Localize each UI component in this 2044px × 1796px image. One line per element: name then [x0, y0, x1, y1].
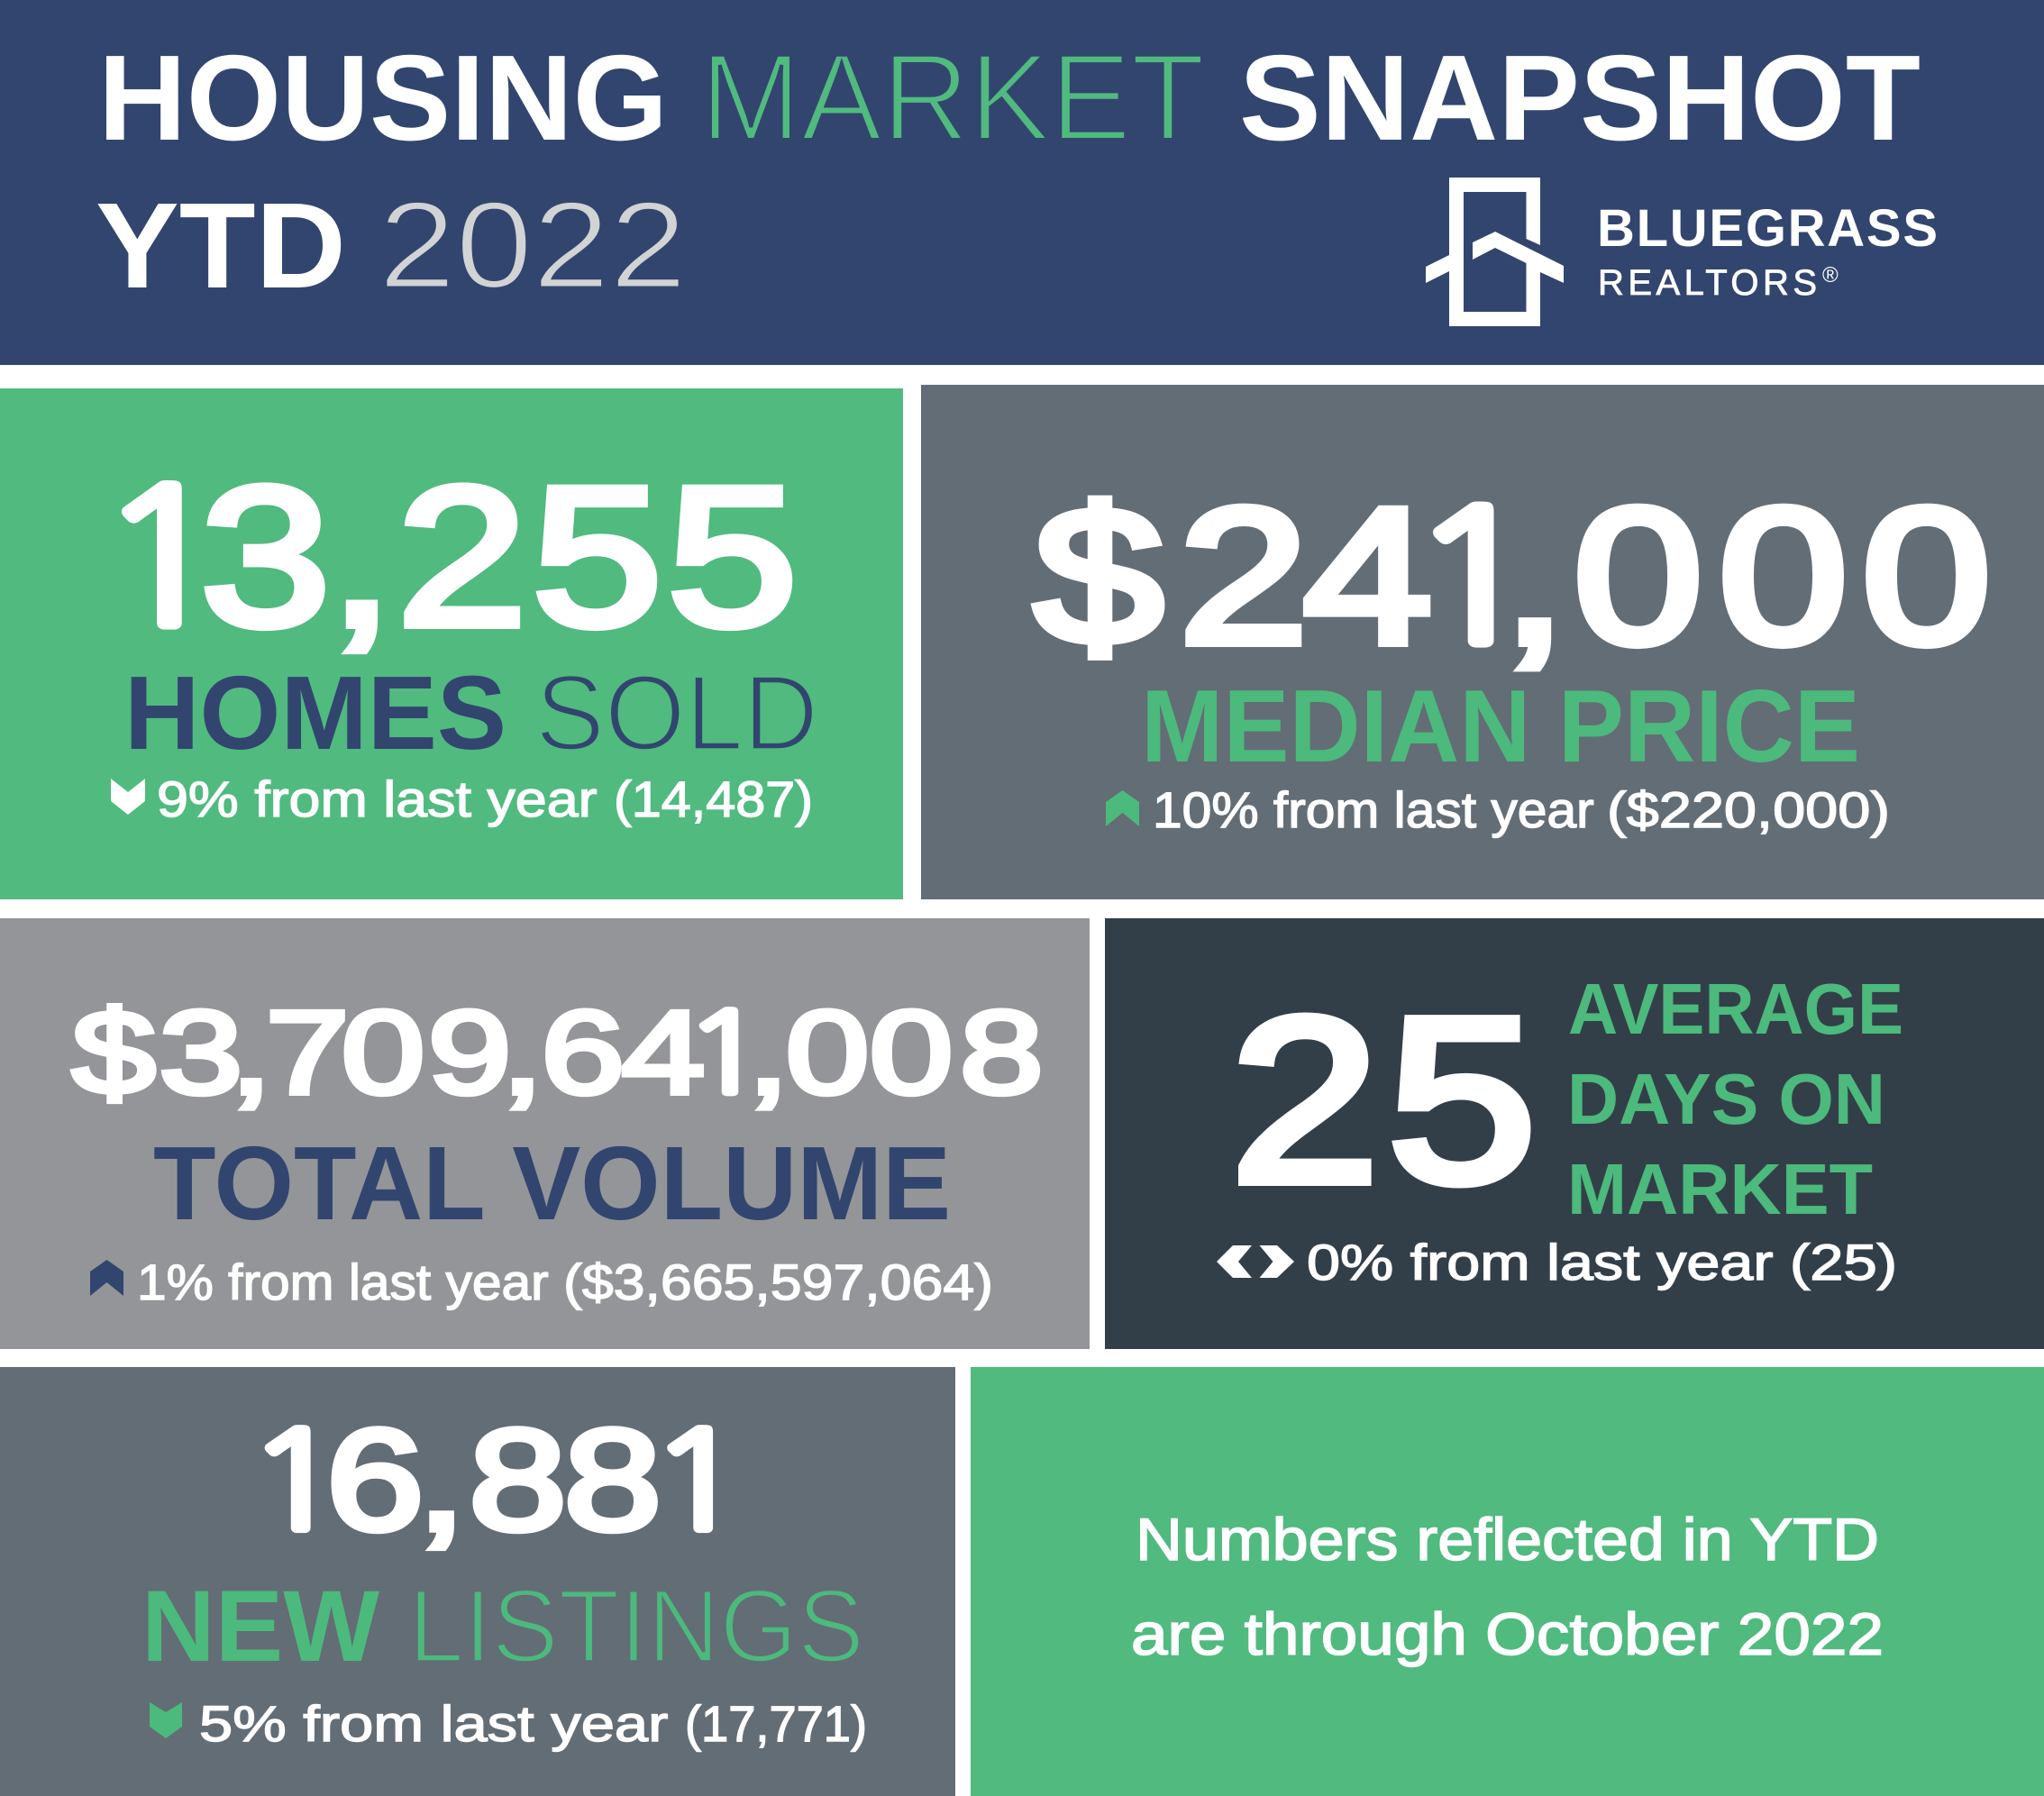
- note text: [1131, 1506, 1884, 1667]
- change text: 9% from last year: [157, 770, 613, 827]
- panel: note: [971, 1367, 2044, 1796]
- change text: 10% from last year: [1153, 781, 1609, 838]
- title line 2: YTD: [96, 178, 346, 314]
- panel: homes sold: [0, 388, 903, 899]
- big number: 25: 25: [1230, 970, 1537, 1231]
- icon: house in door: [1426, 178, 1564, 326]
- title line 1: MARKET: [700, 29, 1205, 167]
- panel: median price: [921, 385, 2044, 899]
- big number: $241,000: $241,000: [1035, 469, 1991, 684]
- title line 1: SNAPSHOT: [1239, 30, 1921, 166]
- logo wordmark: ®: [1822, 263, 1839, 287]
- change text: 0% from last year: [1307, 1234, 1790, 1290]
- heading: homes sold: [124, 653, 818, 773]
- heading: average days on market: DAYS ON: [1567, 1059, 1885, 1139]
- change text: (14,487): [614, 770, 813, 827]
- change text: 5% from last year: [199, 1695, 685, 1752]
- logo wordmark: REALTORS: [1598, 263, 1817, 303]
- change text: (17,771): [685, 1695, 867, 1752]
- change text: (25): [1790, 1234, 1897, 1290]
- logo: Bluegrass Realtors: [1426, 178, 1938, 326]
- heading: median price: MEDIAN PRICE: [1141, 670, 1860, 784]
- icon: down chevron: [150, 1702, 182, 1738]
- icon: down chevron: [111, 779, 145, 815]
- change text: ($220,000): [1607, 781, 1890, 838]
- heading: homes sold: SOLD: [535, 653, 818, 773]
- title line 2: 2022: [379, 177, 687, 315]
- heading: new listings: NEW: [141, 1570, 379, 1682]
- note text: are through October 2022: [1131, 1600, 1884, 1667]
- heading: new listings: LISTINGS: [408, 1569, 864, 1684]
- change text: ($3,665,597,064): [563, 1254, 993, 1310]
- note text: Numbers reflected in YTD: [1136, 1506, 1879, 1573]
- icon: up chevron: [90, 1260, 123, 1296]
- title line 2: [96, 177, 687, 315]
- logo wordmark: [1597, 199, 1938, 303]
- big number: 16,881: 16,881: [245, 1399, 748, 1560]
- heading: average days on market: [1567, 969, 1903, 1229]
- panel: average days on market: [1105, 918, 2044, 1349]
- heading: average days on market: AVERAGE: [1568, 969, 1903, 1049]
- big number: 13,255: 13,255: [95, 445, 798, 667]
- big number: $3,709,641,008: $3,709,641,008: [72, 986, 1044, 1118]
- panel: total volume: [0, 918, 1090, 1349]
- logo wordmark: BLUEGRASS: [1597, 199, 1938, 258]
- icon: no-change chevrons: [1217, 1245, 1294, 1278]
- heading: average days on market: MARKET: [1567, 1149, 1873, 1229]
- icon: up chevron: [1106, 790, 1139, 826]
- title line 1: [98, 29, 1921, 167]
- title line 1: HOUSING: [98, 30, 668, 166]
- heading: new listings: [141, 1569, 864, 1684]
- panel: header: [0, 0, 2044, 365]
- change text: 1% from last year: [137, 1254, 563, 1310]
- heading: homes sold: HOMES: [124, 654, 506, 771]
- heading: total volume: TOTAL VOLUME: [153, 1125, 951, 1242]
- panel: new listings: [0, 1367, 955, 1796]
